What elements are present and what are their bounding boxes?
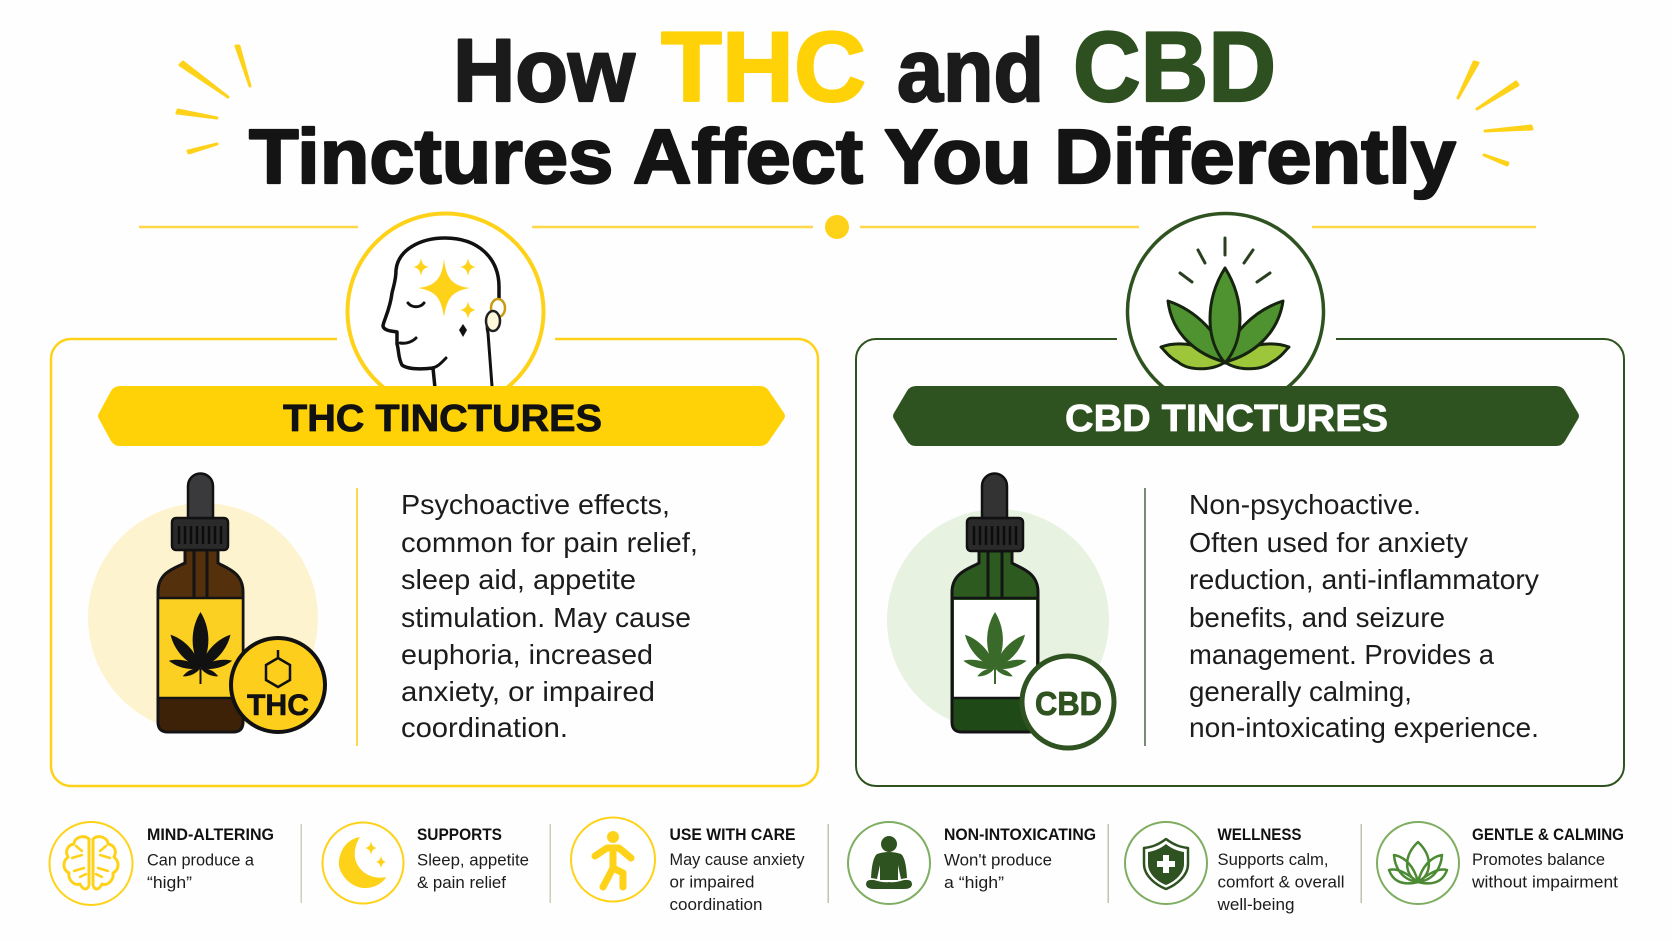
text: CBD description (1189, 489, 1539, 743)
banner: CBD tinctures: CBD TINCTURES (1065, 398, 1388, 440)
banner: CBD tinctures (893, 386, 1579, 446)
text: GENTLE & CALMING (1472, 825, 1624, 844)
text (1471, 825, 1624, 892)
text: well-being (1216, 896, 1294, 914)
text: comfort & overall (1218, 874, 1344, 892)
text: CBD description: Often used for anxiety (1189, 527, 1468, 558)
icon: glowing leaf (1128, 213, 1324, 388)
text: a “high” (944, 874, 1004, 892)
text: Won't produce (944, 852, 1052, 870)
text: Promotes balance (1472, 851, 1605, 869)
badge: CBD (1022, 656, 1114, 748)
text: Supports calm, (1218, 851, 1328, 869)
text: THC description: euphoria, increased (401, 639, 653, 670)
icon: left sunburst (177, 46, 250, 153)
text: THC description: coordination. (401, 712, 568, 743)
vertical divider (1144, 488, 1146, 746)
benefit: wellness (1125, 822, 1344, 914)
panel: CBD tinctures (856, 213, 1624, 786)
icon: shield with cross (1125, 822, 1207, 904)
benefit: supports (322, 822, 529, 904)
text: May cause anxiety (670, 851, 805, 869)
header divider with dot (139, 215, 1536, 239)
text (944, 825, 1096, 892)
text: SUPPORTS (417, 825, 502, 844)
icon: moon and stars (322, 822, 404, 904)
separator (300, 824, 302, 903)
banner: THC tinctures (98, 386, 785, 446)
benefit: use with care (571, 818, 805, 914)
benefit: gentle and calming (1377, 822, 1624, 904)
text (417, 825, 529, 892)
text: WELLNESS (1218, 825, 1302, 844)
text: CBD description: benefits, and seizure (1189, 602, 1445, 633)
title (249, 11, 1456, 200)
text: MIND-ALTERING (147, 825, 274, 844)
text: without impairment (1471, 874, 1618, 892)
text: THC description: stimulation. May cause (401, 602, 691, 633)
text: THC description: anxiety, or impaired (401, 676, 655, 707)
icon: walking person (571, 818, 655, 902)
text: CBD description: non-intoxicating experience. (1189, 712, 1539, 743)
text: Can produce a (147, 852, 255, 870)
text: CBD description: Non-psychoactive. (1189, 489, 1421, 520)
badge: THC: THC (247, 689, 309, 722)
text: THC description: sleep aid, appetite (401, 564, 636, 595)
text: THC description (401, 489, 698, 743)
icon: brain (50, 822, 132, 905)
banner: THC tinctures: THC TINCTURES (283, 398, 602, 440)
title: THC (661, 11, 866, 122)
text (147, 825, 274, 892)
text: “high” (147, 874, 192, 892)
text: CBD description: reduction, anti-inflammatory (1189, 564, 1539, 595)
separator (828, 824, 829, 903)
icon: THC bottle (88, 474, 325, 733)
benefit: mind-altering (50, 822, 274, 905)
text: THC description: Psychoactive effects, (401, 489, 670, 520)
panel frame (51, 339, 818, 786)
separator (1108, 824, 1109, 903)
title: How (453, 20, 636, 120)
badge: CBD: CBD (1035, 685, 1102, 722)
benefit: non-intoxicating (848, 822, 1096, 904)
text: CBD description: generally calming, (1189, 676, 1412, 707)
panel: THC tinctures (51, 213, 818, 786)
text: Sleep, appetite (417, 852, 529, 870)
text: CBD description: management. Provides a (1189, 639, 1494, 670)
icon: meditating person (848, 822, 930, 904)
text: THC description: common for pain relief, (401, 527, 698, 558)
icon: head with sparkles (348, 213, 544, 388)
separator (1360, 824, 1362, 903)
panel frame (856, 339, 1624, 786)
icon: right sunburst (1458, 62, 1532, 165)
title: and (897, 20, 1044, 120)
text: NON-INTOXICATING (944, 825, 1096, 844)
badge: THC (231, 638, 325, 732)
text: coordination (670, 896, 762, 914)
title: Tinctures Affect You Differently (249, 114, 1456, 200)
separator (550, 824, 551, 903)
text: & pain relief (417, 874, 506, 892)
text (1216, 825, 1344, 914)
icon: lotus (1377, 822, 1459, 904)
vertical divider (356, 488, 358, 746)
text: or impaired (670, 874, 754, 892)
title: CBD (1073, 11, 1276, 122)
icon: CBD bottle (887, 473, 1114, 748)
text: USE WITH CARE (670, 825, 796, 844)
text (670, 825, 805, 914)
